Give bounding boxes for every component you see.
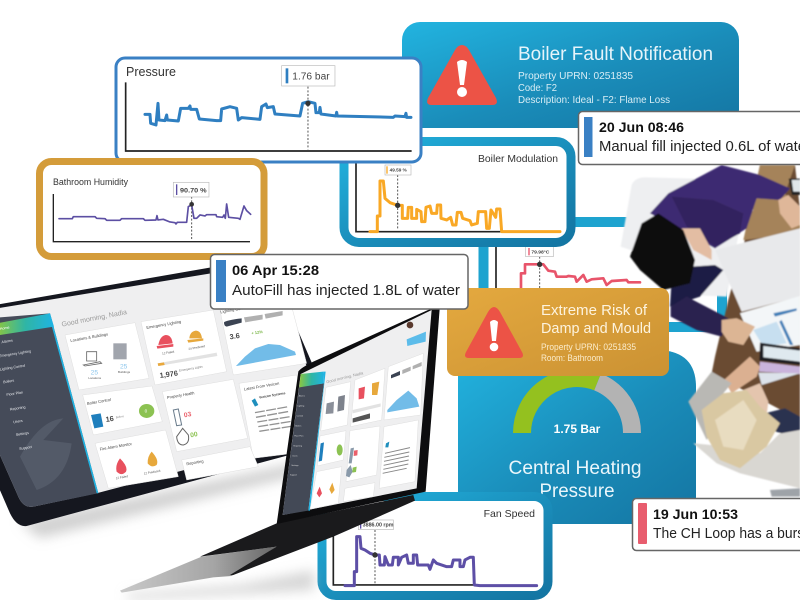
laptop lid and screen: Boilers: [295, 425, 301, 428]
card: boiler control: Boilers: [116, 414, 125, 419]
card: emergency lighting: 12 Failed: [162, 350, 175, 356]
gauge: pressure arc: [522, 378, 632, 433]
callout: autofill event: AutoFill has injected 1.8L of water: [232, 283, 460, 299]
panel: bathroom humidity chart: [40, 162, 264, 256]
laptop lid and screen: Support: [290, 473, 297, 476]
text: property details: Description: Ideal - F2: Flame Loss: [518, 94, 670, 106]
laptop lid and screen: [277, 305, 440, 524]
laptop sidebar: [283, 383, 324, 515]
panel: boiler modulation chart: [344, 142, 571, 242]
laptop usage chart: [387, 391, 419, 412]
panel: central heating pressure: [458, 350, 696, 524]
card: emergency lighting: 1,976: [159, 369, 178, 380]
laptop lid and screen: Users: [292, 455, 298, 458]
card: locations and buildings: 25: [91, 370, 98, 377]
callout: autofill event: 06 Apr 15:28: [232, 262, 319, 278]
device: tablet dashboard: [0, 258, 345, 526]
callout: central heating burst event: 19 Jun 10:53: [653, 506, 738, 522]
sidebar menu: Lighting Control: [0, 364, 26, 372]
card: emergency lighting: 24 Predicted: [188, 344, 206, 351]
panel: damp and mould alert: [447, 288, 669, 376]
card: fire alarm monitor: Fire Alarm Monitor: [99, 441, 133, 452]
card: locations and buildings: Locations: [88, 376, 102, 380]
card: locations and buildings: Buildings: [118, 370, 131, 374]
card: latest from vericon: Vericon Systems: [259, 391, 286, 400]
sidebar menu: [0, 326, 32, 451]
heading: bathroom humidity: Bathroom Humidity: [53, 177, 128, 187]
table: [712, 165, 800, 420]
blonde woman arm and top: [724, 357, 760, 393]
laptop lid and screen: Control: [297, 415, 304, 418]
card: lighting control: Lighting Control: [220, 305, 248, 314]
chart: modulation line: 49.59 %: [390, 168, 408, 173]
panel: pressure chart: [116, 58, 421, 162]
heading: extreme risk: Damp and Mould: [541, 320, 651, 337]
callout: autofill event: [210, 254, 468, 309]
laptop lid and screen: Floor Plan: [294, 435, 303, 438]
card: emergency lighting: [141, 310, 227, 385]
blonde hair: [702, 390, 780, 468]
chart: temperature line: 79.98°C: [531, 250, 550, 256]
card: lighting control: 3.6: [229, 331, 240, 341]
card: emergency lighting: Emergency Lighting: [146, 319, 182, 330]
card: boiler control: [83, 386, 162, 435]
sidebar menu: Users: [13, 419, 23, 424]
icon: warning triangle: [427, 45, 497, 105]
callout: manual fill event: 20 Jun 08:46: [599, 119, 684, 135]
laptop lid and screen: Reporting: [293, 445, 302, 448]
chart: humidity line: 90.70 %: [180, 187, 207, 194]
sidebar menu: Settings: [16, 431, 29, 437]
card: reporting: [182, 447, 258, 480]
text: property and room: [541, 342, 636, 363]
heading: central heating pressure: Central Heating: [508, 458, 642, 479]
face: [743, 383, 768, 415]
card: property health: Property Health: [167, 390, 195, 400]
tablet body: [0, 258, 345, 526]
heading: pressure: Pressure: [126, 65, 176, 79]
text: property and room: Property UPRN: 0251835: [541, 342, 636, 352]
panel: boiler fault notification: [402, 22, 739, 128]
heading: extreme risk: [541, 302, 651, 337]
collar and sleeve: [670, 265, 723, 307]
chart: pressure line: [126, 66, 412, 151]
laptop lid and screen: Alarms: [299, 395, 305, 398]
sidebar menu: Alarms: [1, 339, 13, 344]
text: property details: Code: F2: [518, 82, 557, 94]
sidebar menu: Reporting: [10, 405, 26, 412]
heading: extreme risk: Extreme Risk of: [541, 302, 648, 319]
heading: boiler fault notification: Boiler Fault Notification: [518, 44, 713, 65]
laptop lid and screen: Lighting: [297, 405, 304, 408]
card: locations and buildings: Locations & Buildings: [70, 331, 108, 343]
laptop lid and screen: Settings: [291, 464, 299, 467]
woman in purple top: [650, 165, 790, 248]
card: latest from vericon: [239, 375, 320, 458]
chart: pressure line: 1.76 bar: [292, 71, 330, 82]
card: boiler control: Boiler Control: [87, 397, 111, 406]
photo: two people at a table viewed from above: [621, 165, 800, 497]
card: fire alarm monitor: 12 Failed: [115, 474, 129, 480]
tablet screen: [0, 265, 335, 507]
card: emergency lighting: Emergency Lights: [179, 364, 204, 373]
white chair: [621, 177, 753, 297]
sidebar: [0, 313, 98, 507]
document with charts: [740, 296, 800, 352]
text: gauge value: 1.75 Bar: [554, 422, 601, 436]
tablet held by blonde woman: [759, 343, 800, 365]
sidebar menu: Boilers: [3, 379, 15, 384]
card: reporting: Reporting: [186, 458, 204, 466]
card: lighting control: [220, 300, 307, 375]
chart: temperature line: [496, 247, 640, 290]
panel: flow temperature chart: [484, 222, 722, 327]
card: boiler control: 16: [105, 414, 114, 424]
sidebar menu: Floor Plan: [6, 390, 23, 397]
hand on document: [722, 318, 755, 345]
card: boiler control: 0: [145, 409, 148, 414]
card: lighting control: + 12%: [251, 329, 264, 336]
chart: usage bars: [236, 344, 296, 366]
laptop avatar and button: [407, 322, 426, 346]
card: locations and buildings: [65, 323, 149, 390]
chart: fan speed line: [333, 520, 537, 586]
card: latest from vericon: Latest From Vericon: [244, 381, 280, 392]
card: property health: 00: [190, 431, 199, 439]
paper sheet: [715, 228, 800, 312]
chart: humidity line: [53, 182, 251, 242]
device: laptop: [120, 305, 440, 593]
hand on table: [778, 195, 800, 228]
face: [682, 228, 712, 260]
chart: fan speed line: 3886.00 rpm: [363, 523, 394, 529]
card: locations and buildings: 25: [120, 364, 128, 371]
card: fire alarm monitor: [95, 430, 178, 488]
heading: boiler modulation: Boiler Modulation: [478, 153, 558, 165]
phone: [789, 179, 800, 195]
greeting: Good morning, Nadia: [61, 309, 128, 329]
chart: modulation line: [356, 153, 560, 232]
shadow: under devices: [20, 458, 320, 600]
heading: fan speed: Fan Speed: [484, 508, 535, 520]
heading: central heating pressure: [508, 458, 642, 502]
scarf: [765, 408, 800, 433]
laptop base: [120, 495, 415, 593]
laptop greeting: Good morning, Nadia: [326, 370, 364, 384]
black hair: [630, 213, 695, 290]
callout: manual fill event: [578, 112, 800, 164]
text: property details: Property UPRN: 0251835: [518, 70, 633, 82]
card: property health: [162, 379, 248, 452]
card: property health: 03: [183, 411, 192, 419]
text: property details: [518, 70, 670, 106]
callout: central heating burst event: [632, 498, 800, 550]
laptop cards: [310, 353, 423, 509]
heading: central heating pressure: Pressure: [540, 481, 614, 502]
text: property and room: Room: Bathroom: [541, 353, 603, 363]
panel: fan speed chart: [322, 496, 548, 596]
callout: manual fill event: Manual fill injected 0.6L of water: [599, 139, 800, 155]
card: fire alarm monitor: 12 Predicted: [143, 469, 161, 476]
sidebar menu: Support: [19, 445, 32, 451]
icon: warning triangle: [465, 307, 523, 358]
